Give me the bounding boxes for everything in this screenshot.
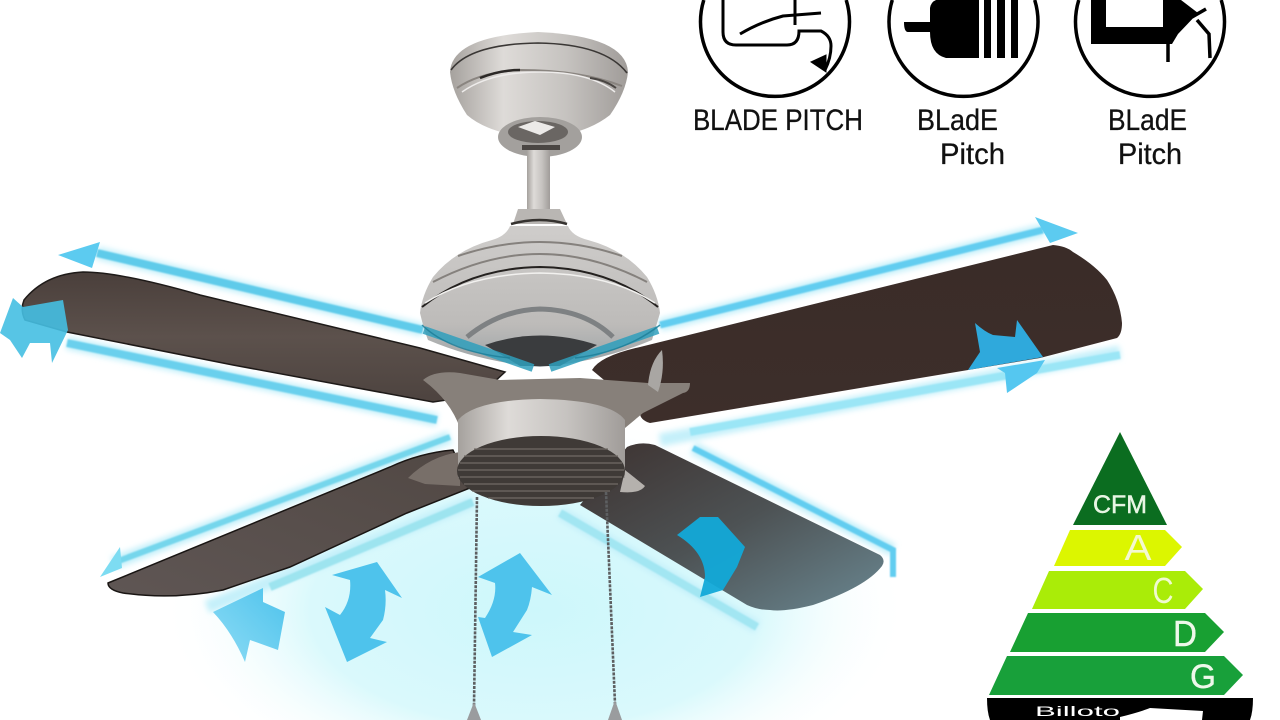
pull chain weights — [467, 700, 622, 720]
teal airflow crossing motor — [422, 325, 660, 368]
blade brackets — [423, 372, 690, 428]
label: blade pitch 2: Pitch — [940, 138, 1005, 171]
label: blade pitch 2: BLadE — [917, 104, 998, 137]
airflow glow below fan — [160, 415, 910, 720]
label: blade pitch 2 — [917, 104, 1005, 171]
energy rating pyramid — [987, 432, 1253, 720]
tier: A: A — [1124, 527, 1152, 568]
fan blade: lower right — [580, 443, 884, 610]
airflow streak halos — [67, 230, 1120, 627]
label: blade pitch 3: Pitch — [1118, 138, 1182, 171]
streak arrowhead on right blade — [997, 360, 1045, 393]
curved airflow arrow 3 — [478, 553, 552, 657]
tier: C: C — [1152, 570, 1174, 611]
motor housing — [420, 209, 660, 367]
tier: D: D — [1173, 613, 1197, 654]
downrod — [527, 150, 550, 210]
fan blade: lower left — [108, 450, 470, 596]
pull chains — [474, 492, 615, 706]
fan blade: upper left — [22, 272, 505, 402]
tier: G — [989, 656, 1243, 696]
icon: blade pitch 2 — [889, 0, 1038, 96]
label: blade pitch 3 — [1108, 104, 1187, 171]
airflow streaks along blades — [67, 230, 1120, 627]
switch housing — [457, 399, 625, 506]
tier: G: G — [1190, 658, 1216, 696]
label: blade pitch 1: BLADE PITCH — [693, 104, 863, 137]
icon: blade pitch 3 — [1076, 0, 1224, 96]
curved airflow arrow 6 at left tip — [0, 298, 68, 363]
curved airflow arrow 5 — [968, 320, 1043, 370]
curved airflow arrow 2 — [325, 562, 402, 662]
fan blade: upper right — [592, 245, 1122, 423]
arrowheads on streaks — [58, 217, 1078, 577]
light kit grille — [457, 436, 625, 506]
black footer band — [987, 698, 1253, 720]
ceiling canopy — [450, 32, 628, 157]
black footer band: Billoto — [1035, 703, 1120, 719]
tier: CFM — [1073, 432, 1167, 525]
icon: blade pitch 1 — [701, 0, 849, 96]
label: blade pitch 3: BLadE — [1108, 104, 1187, 137]
tier: A — [1054, 527, 1182, 568]
curved airflow arrow 4 — [677, 517, 745, 597]
curved airflow arrow 1 — [213, 588, 285, 662]
tier: CFM: CFM — [1093, 491, 1147, 519]
tier: C — [1032, 570, 1203, 611]
tier: D — [1010, 613, 1224, 654]
